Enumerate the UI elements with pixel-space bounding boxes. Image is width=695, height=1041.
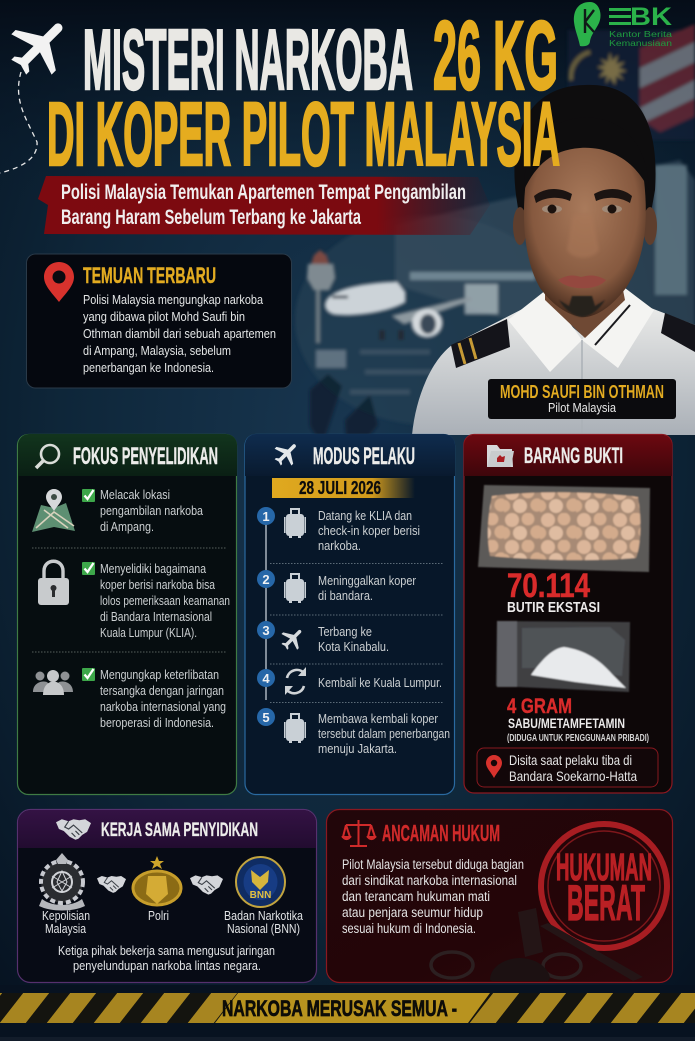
icon: people xyxy=(33,670,73,695)
step 2 xyxy=(284,573,417,603)
check and item 1: di Ampang. xyxy=(100,519,154,534)
icon: magnifier xyxy=(36,445,59,468)
panel: modus pelaku xyxy=(245,434,455,794)
icon: scales xyxy=(343,820,375,846)
step 1: narkoba. xyxy=(318,538,361,553)
subtitle banner: Barang Haram Sebelum Terbang ke Jakarta xyxy=(61,206,361,229)
body text xyxy=(342,857,524,936)
date banner: 28 JULI 2026 xyxy=(299,478,381,498)
logo: KBK: Kantor Berita xyxy=(609,30,673,39)
body text: Ketiga pihak bekerja sama mengusut jaringan xyxy=(58,943,275,958)
panel: kerja sama penyidikan xyxy=(18,810,316,982)
epaulette right xyxy=(661,313,695,352)
malaysian flag backdrop xyxy=(568,24,695,140)
check and item 2: lolos pemeriksaan keamanan xyxy=(100,593,230,608)
agency labels: Kepolisian xyxy=(42,908,90,923)
stat: 70.114: 70.114 xyxy=(507,567,590,605)
callout: seized at airport: Disita saat pelaku tiba di xyxy=(509,752,632,768)
check and item 3 xyxy=(82,667,226,730)
check and item 1: Melacak lokasi xyxy=(100,487,170,502)
heading: TEMUAN TERBARU xyxy=(83,263,216,288)
check and item 1: pengambilan narkoba xyxy=(100,503,204,518)
title xyxy=(47,1,560,185)
timeline xyxy=(257,507,443,726)
check and item 2 xyxy=(82,561,230,640)
body text xyxy=(83,292,276,375)
check and item 2: Kuala Lumpur (KLIA). xyxy=(100,625,197,640)
portrait: pilot xyxy=(412,85,695,435)
step 4 xyxy=(285,667,442,695)
icon: location pin xyxy=(44,262,74,302)
photo: bag of ecstasy pills xyxy=(478,485,650,572)
icon: airplane with dashed flight path xyxy=(0,5,81,173)
step 5: Membawa kembali koper xyxy=(318,711,439,726)
hazard tape banner: NARKOBA MERUSAK SEMUA - xyxy=(222,996,457,1021)
body text: sesuai hukum di Indonesia. xyxy=(342,921,476,936)
name plate: Pilot Malaysia xyxy=(548,400,617,415)
timeline: 3 xyxy=(262,623,270,638)
logo: KBK: BK xyxy=(630,3,672,31)
airport scene xyxy=(295,160,695,450)
photo: bag of crystal meth xyxy=(496,621,630,692)
body text: dari sindikat narkoba internasional xyxy=(342,873,517,888)
check and item 2: Menyelidiki bagaimana xyxy=(100,561,207,576)
logo: polri xyxy=(133,856,181,905)
agency labels: Nasional (BNN) xyxy=(227,921,300,936)
heading: FOKUS PENYELIDIKAN xyxy=(73,443,218,470)
agency labels xyxy=(42,908,304,936)
timeline: 4 xyxy=(262,671,270,686)
logo: KBK xyxy=(574,2,673,48)
agency labels: Polri xyxy=(148,908,169,923)
check and item 1 xyxy=(82,487,204,534)
logo: bnn xyxy=(236,857,285,907)
step 3: Kota Kinabalu. xyxy=(318,639,389,654)
step 1 xyxy=(284,508,420,553)
nose xyxy=(567,215,599,258)
body text: di Ampang, Malaysia, sebelum xyxy=(83,343,231,358)
eyebrows xyxy=(534,189,572,203)
stamp: hukuman berat xyxy=(541,824,667,948)
body text: Othman diambil dari sebuah apartemen xyxy=(83,326,276,341)
fringe xyxy=(524,118,649,190)
icon: handshake xyxy=(97,876,126,893)
body text: atau penjara seumur hidup xyxy=(342,905,483,920)
check and item 3: beroperasi di Indonesia. xyxy=(100,715,214,730)
panel: barang bukti xyxy=(464,434,672,793)
body text: dan terancam hukuman mati xyxy=(342,889,490,904)
icon: padlock xyxy=(38,561,69,605)
step 3 xyxy=(277,623,389,655)
step 5: tersebut dalam penerbangan xyxy=(318,726,450,741)
timeline: 1 xyxy=(262,509,270,524)
step 4: Kembali ke Kuala Lumpur. xyxy=(318,675,442,690)
ears xyxy=(513,207,527,245)
stat: 4 gram: SABU/METAMFETAMIN xyxy=(508,715,625,731)
logo: kepolisian malaysia xyxy=(39,853,85,910)
body text: penyelundupan narkoba lintas negara. xyxy=(73,958,261,973)
check and item 3: narkoba internasional yang xyxy=(100,699,226,714)
neck xyxy=(545,285,625,338)
logo: bnn: BNN xyxy=(250,890,271,901)
shirt xyxy=(412,298,695,435)
agency labels: Badan Narkotika xyxy=(224,908,304,923)
timeline: 5 xyxy=(262,710,270,725)
stat: 70.114: BUTIR EKSTASI xyxy=(507,599,600,616)
timeline: 2 xyxy=(262,572,270,587)
icon: airplane xyxy=(269,436,304,471)
step 2: di bandara. xyxy=(318,588,373,603)
step 1: check-in koper berisi xyxy=(318,523,420,538)
step 5 xyxy=(284,711,450,756)
subtitle banner: Polisi Malaysia Temukan Apartemen Tempat Pengambilan xyxy=(61,181,466,204)
icon: handshake xyxy=(56,819,91,840)
check and item 2: koper berisi narkoba bisa xyxy=(100,577,216,592)
body text: Polisi Malaysia mengungkap narkoba xyxy=(83,292,264,307)
logo: KBK: Kemanusiaan xyxy=(609,39,672,48)
body text: Pilot Malaysia tersebut diduga bagian xyxy=(342,857,524,872)
callout: seized at airport xyxy=(477,748,658,787)
step 3: Terbang ke xyxy=(318,624,372,639)
gavel and handcuffs xyxy=(431,908,643,981)
heading: BARANG BUKTI xyxy=(524,443,623,468)
mouth xyxy=(558,275,606,288)
face xyxy=(524,137,646,317)
check and item 2: di Bandara Internasional xyxy=(100,609,212,624)
icon: handshake xyxy=(190,875,223,895)
hair back xyxy=(514,85,656,235)
stat: 4 gram xyxy=(507,695,649,744)
step 2: Meninggalkan koper xyxy=(318,573,417,588)
panel: ancaman hukum xyxy=(326,810,672,982)
body text: yang dibawa pilot Mohd Saufi bin xyxy=(83,309,245,324)
icon: evidence folder xyxy=(487,445,514,467)
body text xyxy=(58,943,275,973)
heading: ANCAMAN HUKUM xyxy=(382,820,500,846)
step 5: menuju Jakarta. xyxy=(318,741,397,756)
check and item 3: Mengungkap keterlibatan xyxy=(100,667,219,682)
agency labels: Malaysia xyxy=(45,921,87,936)
eyes xyxy=(542,205,562,213)
goatee xyxy=(559,296,605,317)
check and item 3: tersangka dengan jaringan xyxy=(100,683,224,698)
heading: KERJA SAMA PENYIDIKAN xyxy=(101,820,258,841)
name plate xyxy=(488,379,676,419)
step 1: Datang ke KLIA dan xyxy=(318,508,412,523)
heading: MODUS PELAKU xyxy=(313,443,415,470)
panel: temuan terbaru xyxy=(26,254,292,388)
epaulette left xyxy=(451,319,510,368)
panel: fokus penyelidikan xyxy=(18,434,237,794)
subtitle banner xyxy=(38,176,490,235)
callout: seized at airport: Bandara Soekarno-Hatta xyxy=(509,768,637,784)
stat: 4 gram: 4 GRAM xyxy=(507,695,572,718)
icon: map xyxy=(32,489,75,532)
body text: penerbangan ke Indonesia. xyxy=(83,360,214,375)
hazard tape banner xyxy=(0,993,695,1023)
